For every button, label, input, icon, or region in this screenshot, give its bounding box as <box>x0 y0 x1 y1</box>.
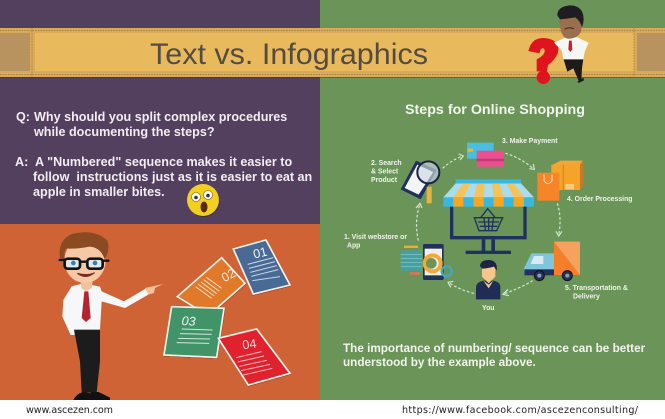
mouth <box>77 273 95 277</box>
title banner <box>0 28 665 78</box>
tie <box>82 291 91 322</box>
title: Text vs. Infographics <box>150 38 428 71</box>
closing statement: understood by the example above. <box>343 356 536 369</box>
label: step 1: 1. Visit webstore or <box>344 234 407 241</box>
closing statement <box>343 342 646 369</box>
icon: phone with gears <box>401 244 452 280</box>
closing statement: The importance of numbering/ sequence can be better <box>343 342 646 355</box>
neck <box>80 277 93 291</box>
label: step 4: 4. Order Processing <box>567 196 632 203</box>
head <box>559 16 581 39</box>
document 03: 03 <box>181 314 196 329</box>
shirt <box>554 37 589 59</box>
answer text: A: <box>15 155 28 169</box>
document 04: 04 <box>241 336 257 352</box>
document 04 <box>218 329 290 385</box>
icon: storefront monitor <box>443 179 534 254</box>
document 01: 01 <box>252 245 269 262</box>
glasses <box>65 259 103 269</box>
tie <box>568 41 572 52</box>
hand <box>145 284 163 295</box>
shopping cycle diagram <box>401 143 583 299</box>
head <box>64 238 106 283</box>
icon: credit cards <box>467 143 504 167</box>
document 03 <box>164 307 224 357</box>
hair <box>557 5 584 27</box>
label: step 2: Product <box>371 177 398 184</box>
step labels: App <box>347 242 360 250</box>
panel: green shopping background <box>320 0 665 400</box>
footer: website: www.ascezen.com <box>26 405 113 416</box>
document 02: 02 <box>219 266 238 285</box>
heading: steps for online shopping: Steps for Online Shopping <box>405 102 585 117</box>
question text <box>16 110 287 139</box>
document 02 <box>177 258 245 316</box>
question text: Why should you split complex procedures <box>34 110 287 124</box>
answer text <box>15 155 312 199</box>
icon: bag and boxes <box>537 161 583 201</box>
panel: purple question background <box>0 0 320 224</box>
label: step 2: 2. Search <box>371 160 402 167</box>
label: step 2 <box>371 160 402 184</box>
label: step 5: 5. Transportation & <box>565 285 628 292</box>
numbered documents <box>164 240 290 385</box>
label: step 3: 3. Make Payment <box>502 138 558 145</box>
question text: Q: <box>16 110 30 124</box>
character: man pointing <box>59 232 163 400</box>
label: step 5: Delivery <box>573 294 600 300</box>
cycle arrows <box>417 153 560 294</box>
icon: surprised emoji <box>187 184 220 217</box>
answer text: apple in smaller bites. <box>33 185 165 199</box>
icon: delivery truck <box>524 242 580 281</box>
character: man with question mark <box>528 5 589 84</box>
icon: person <box>476 260 500 299</box>
step labels <box>344 234 407 250</box>
arrow heads <box>416 154 562 296</box>
question text: while documenting the steps? <box>33 125 215 139</box>
shirt and pointing arm <box>62 283 148 335</box>
document 01 <box>233 240 290 294</box>
panel: orange illustration background <box>0 224 320 400</box>
footer: facebook url: https://www.facebook.com/ascezenconsulting/ <box>402 405 639 416</box>
question mark <box>528 38 558 71</box>
answer text: follow instructions just as it is easier to eat an <box>33 170 312 184</box>
hair <box>60 232 109 259</box>
trousers <box>563 59 583 81</box>
answer text: A "Numbered" sequence makes it easier to <box>35 155 292 169</box>
label: step 5 <box>565 285 628 300</box>
label: you: You <box>482 305 495 312</box>
icon: phone with magnifier <box>401 161 439 203</box>
label: step 2: & Select <box>371 168 399 176</box>
icon: basket <box>474 209 503 231</box>
legs and shoes <box>74 330 100 393</box>
